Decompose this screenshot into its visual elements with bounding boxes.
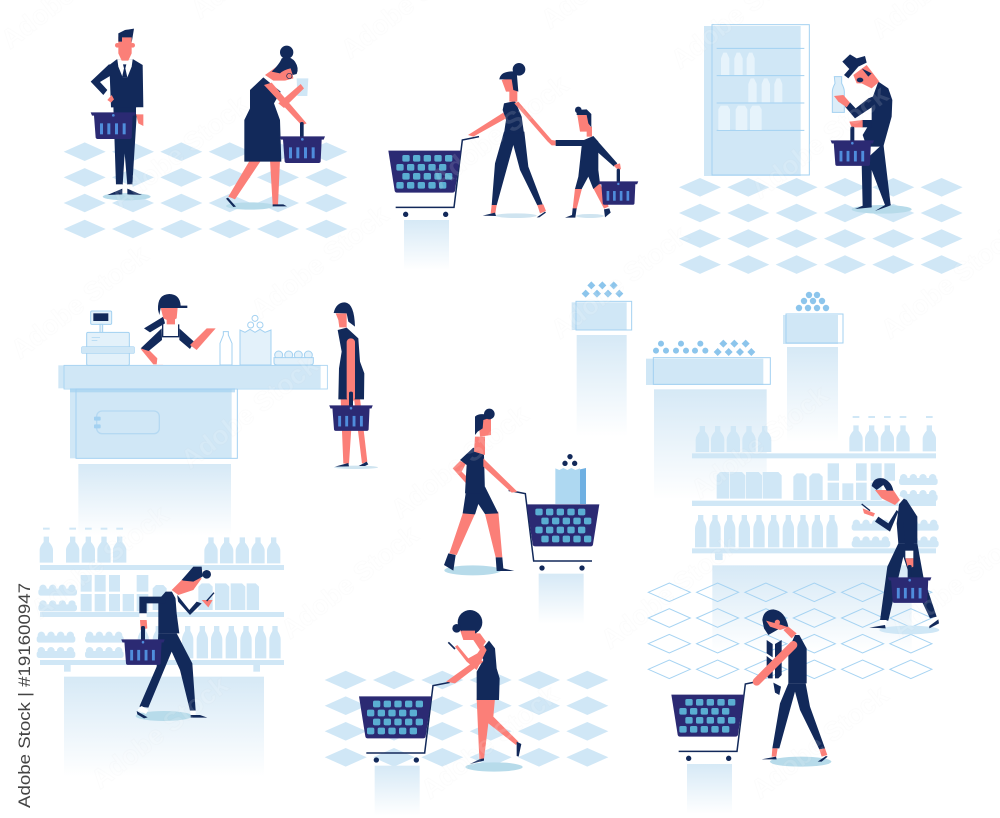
- cart: [359, 682, 450, 816]
- person: woman with baguette and cart: [671, 609, 831, 814]
- floor tiles: bottom centre: [325, 671, 608, 767]
- cart: [671, 681, 762, 814]
- display tower: right stand: [783, 292, 843, 442]
- watermark text: Adobe Stock: [425, 69, 575, 195]
- grocery bag: [240, 315, 271, 365]
- right-hand store shelves: [692, 416, 939, 652]
- person: man in suit with basket: [91, 29, 151, 200]
- watermark text: Adobe Stock: [385, 399, 535, 525]
- left-hand store shelves: [37, 528, 284, 777]
- watermark text: Adobe Stock: [595, 529, 745, 655]
- person: woman reading shopping list with basket: [226, 46, 325, 210]
- cart with bag: [509, 490, 599, 624]
- watermark text: Adobe Stock: [545, 219, 695, 345]
- stock credit vertical text: Adobe Stock | #191600947: [15, 583, 34, 808]
- person: child with basket: [556, 107, 638, 218]
- person: mother with shopping cart: [388, 63, 556, 270]
- watermark text: Adobe Stock: [85, 669, 235, 795]
- floor tiles: outlined: [648, 583, 932, 679]
- watermark text: Adobe Stock: [275, 519, 425, 645]
- person: woman waiting in line with basket: [329, 302, 378, 469]
- baguette: [767, 640, 782, 695]
- person: man in hat inspecting bottle: [831, 54, 912, 214]
- watermark text: Adobe Stock: [745, 679, 895, 805]
- display towers with products: [572, 281, 770, 499]
- person: man on phone with basket, right aisle: [862, 478, 939, 634]
- watermark text: Adobe Stock: [245, 199, 395, 325]
- person: cashier: [141, 294, 216, 364]
- watermark text: Adobe Stock: [415, 679, 565, 805]
- watermark text: Adobe Stock: [105, 89, 255, 215]
- shopping cart: [388, 137, 479, 270]
- person: man on phone with basket, left aisle: [121, 567, 214, 721]
- watermark text: Adobe Stock: [685, 379, 835, 505]
- egg tray: [274, 351, 313, 365]
- person: woman on phone with cart: [359, 610, 523, 816]
- floor tiles: top right: [679, 178, 963, 274]
- person: man pushing cart with groceries: [444, 409, 599, 624]
- checkout counter: [58, 311, 327, 536]
- watermark text: Adobe Stock: [745, 79, 895, 205]
- cash register: [82, 311, 134, 365]
- milk bottle: [220, 332, 232, 365]
- floor tiles: top left: [64, 142, 347, 238]
- refrigerated shelf unit: [704, 25, 809, 176]
- watermark text: Adobe Stock: [25, 499, 175, 625]
- watermark text: Adobe Stock: [5, 239, 155, 365]
- grocery bag in cart: [555, 454, 586, 504]
- watermark text: Adobe Stock: [175, 349, 325, 475]
